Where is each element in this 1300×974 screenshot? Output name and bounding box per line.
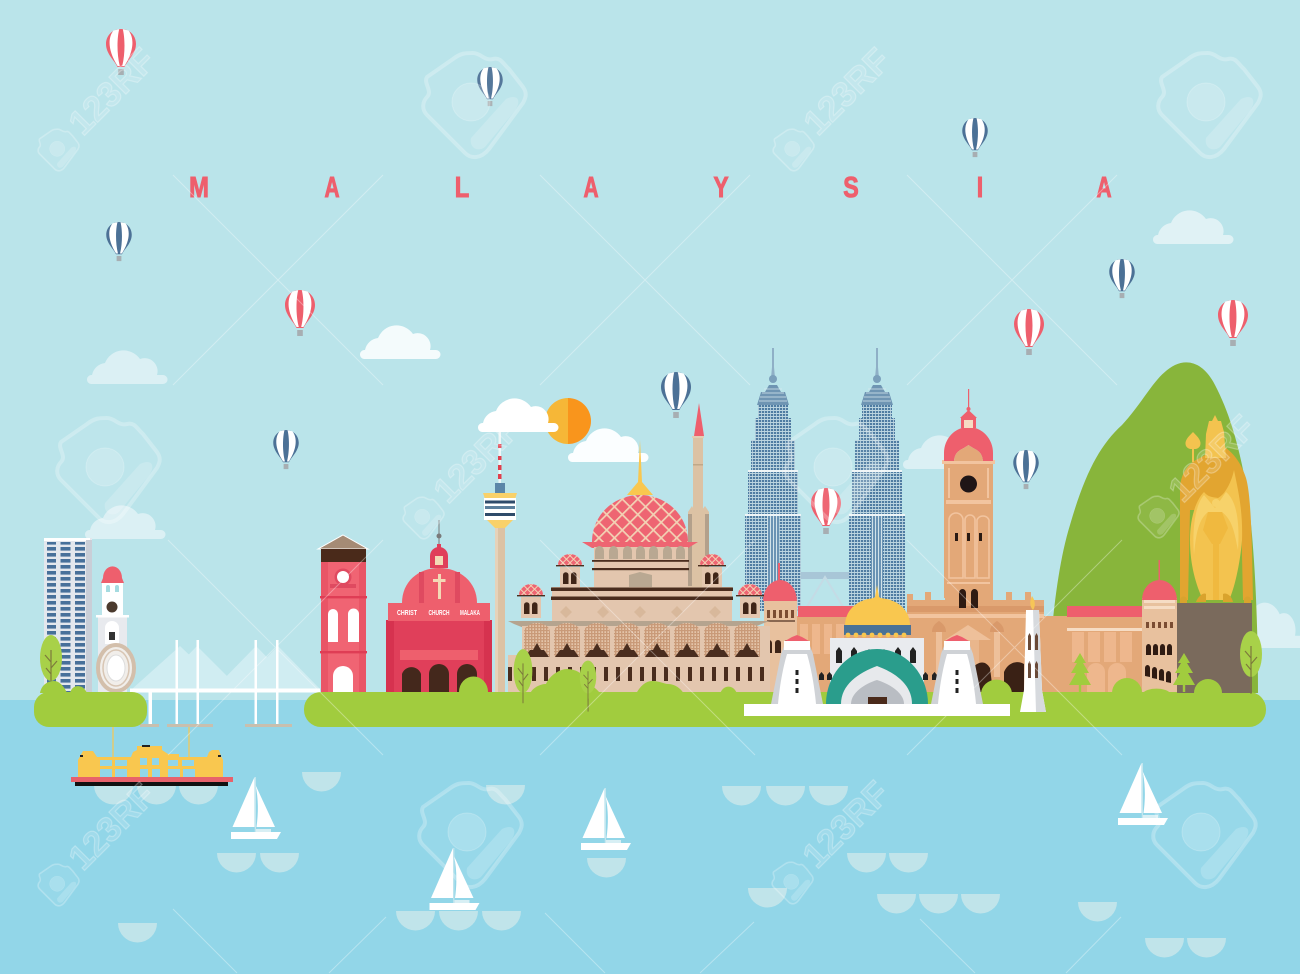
watermark logo [403, 497, 444, 539]
blue balloon [661, 372, 691, 418]
Sultan Abdul Samad building [763, 389, 1177, 693]
bridge cables [132, 646, 320, 689]
base detail [1180, 593, 1251, 603]
watermark logo [1138, 496, 1179, 538]
cloud [360, 325, 440, 359]
spear [1185, 432, 1201, 462]
pine [1069, 653, 1091, 692]
church name [397, 610, 480, 617]
awning [508, 621, 770, 628]
antenna [498, 432, 501, 483]
sailboat [581, 788, 631, 850]
main land [304, 692, 1266, 727]
left pavilion [763, 563, 797, 693]
body [1190, 470, 1242, 600]
white wall [830, 638, 924, 704]
right bush [1194, 679, 1222, 693]
Petronas twin towers [745, 348, 905, 611]
white obelisk [1020, 596, 1046, 712]
arched doors [402, 664, 477, 692]
title: I [977, 170, 983, 204]
Penang clock tower [96, 566, 134, 692]
bush [720, 687, 737, 694]
red balloon between towers [811, 488, 841, 534]
right tower [931, 635, 983, 704]
clock [330, 584, 356, 588]
roof [318, 535, 368, 549]
cloud [1153, 210, 1234, 244]
cloud [903, 435, 984, 469]
cloud [85, 505, 166, 539]
Christ Church Melaka [386, 520, 492, 692]
crown and head [1205, 415, 1226, 458]
Penang tower block [44, 538, 92, 692]
right tree [1240, 631, 1262, 694]
side pavilions [517, 584, 545, 618]
oval gate [98, 645, 134, 691]
bush [459, 676, 488, 692]
minaret [688, 403, 709, 590]
title [189, 170, 1112, 204]
red clock tower [318, 535, 368, 692]
watermark logo [772, 862, 813, 904]
sailboat [231, 777, 281, 839]
dome [402, 568, 477, 603]
sailboat [430, 848, 480, 910]
ferry [71, 727, 233, 786]
right wing arcades [1072, 632, 1132, 692]
bush [981, 680, 1012, 694]
pedestal [1177, 603, 1252, 693]
cloud [87, 350, 168, 384]
watermark logo [38, 129, 79, 171]
KL Tower [483, 432, 517, 693]
background clouds [85, 210, 1300, 648]
sun [545, 398, 591, 444]
sky background [0, 0, 1300, 701]
watermark text: 123RF [1161, 408, 1263, 510]
tree near pedestal [1173, 653, 1195, 692]
watermark icon [423, 53, 526, 157]
tree [514, 649, 532, 703]
main dome [592, 495, 688, 542]
upper deck [552, 587, 732, 622]
tower left [745, 348, 801, 611]
slit windows [505, 667, 769, 681]
left tower [771, 635, 823, 704]
Batu Caves statue [1177, 415, 1253, 693]
bush [530, 669, 600, 694]
church name: MALAKA [460, 610, 480, 617]
drum [594, 547, 688, 587]
cross [433, 574, 446, 599]
title: M [189, 171, 209, 204]
red balloon [1218, 300, 1248, 346]
bush [636, 681, 684, 694]
watermark text [61, 41, 1263, 878]
main wall [796, 616, 1142, 693]
left island greenery [40, 635, 87, 693]
title: Y [713, 170, 729, 204]
white cloud near sun [478, 398, 558, 432]
arcade [524, 623, 760, 657]
blue balloon [273, 430, 299, 469]
watermark icon [785, 418, 888, 522]
watermark icon [1153, 783, 1256, 887]
small domed pavilion [698, 554, 726, 588]
red balloon [106, 29, 136, 75]
watermark icon [57, 418, 160, 522]
lower wall [508, 626, 770, 692]
battlements [907, 590, 1067, 693]
left island [34, 692, 147, 727]
watermark icon [1158, 53, 1261, 157]
dome finial [870, 585, 884, 600]
watermark lattice [168, 175, 1122, 973]
sailboats [231, 763, 1168, 910]
white and teal mosque [744, 585, 1010, 716]
red balloon [285, 290, 315, 336]
sea [0, 700, 1300, 974]
waves [94, 772, 1226, 958]
watermark text: 123RF [61, 41, 163, 143]
door [333, 666, 353, 692]
left roof [798, 606, 853, 617]
pod [483, 493, 517, 499]
lantern [430, 547, 448, 568]
cloud [1232, 603, 1300, 648]
hill [1048, 362, 1258, 693]
blue balloon [477, 67, 503, 106]
dome band [844, 625, 911, 635]
teal arch [826, 649, 928, 704]
skybridge [800, 572, 850, 610]
golden dome [845, 598, 910, 626]
right pavilion [1142, 560, 1177, 693]
blue balloon [106, 222, 132, 261]
back figure [1180, 445, 1253, 600]
Putra mosque [505, 403, 770, 692]
sailboat [1118, 763, 1168, 825]
dome finial [627, 440, 653, 495]
watermark logo [38, 864, 79, 906]
white platform [744, 704, 1010, 716]
clock tower [942, 389, 995, 608]
watermark text: 123RF [61, 776, 163, 878]
title: A [324, 172, 340, 204]
left wing pillars [800, 624, 844, 654]
church name: CHURCH [428, 610, 450, 617]
blue balloon [1109, 259, 1135, 298]
tower right [849, 348, 905, 611]
title: A [1096, 172, 1112, 204]
Penang bridge [130, 640, 320, 727]
red balloon [1014, 309, 1044, 355]
watermark text: 123RF [426, 409, 528, 511]
dark arches [972, 662, 1024, 693]
church name: CHRIST [397, 610, 418, 617]
tree [580, 660, 596, 712]
hot air balloons [106, 29, 1248, 489]
windows [328, 608, 359, 642]
superstructure [78, 746, 223, 777]
dome eaves [582, 542, 698, 548]
blue balloon [962, 118, 988, 157]
right roof [1067, 606, 1142, 617]
watermark text: 123RF [795, 774, 897, 876]
title: L [455, 171, 469, 204]
land greenery [459, 649, 1170, 712]
central hall details [932, 621, 1004, 677]
small domed pavilions [556, 554, 584, 588]
title: A [583, 172, 599, 204]
watermark icon [419, 783, 522, 887]
bush [1143, 689, 1170, 693]
white cloud beside mosque [568, 428, 648, 462]
title: S [843, 170, 859, 204]
side pavilion [736, 584, 764, 618]
blue balloon [1013, 450, 1039, 489]
bush [1112, 678, 1142, 693]
watermark logo [773, 129, 814, 171]
watermark text: 123RF [796, 41, 898, 143]
